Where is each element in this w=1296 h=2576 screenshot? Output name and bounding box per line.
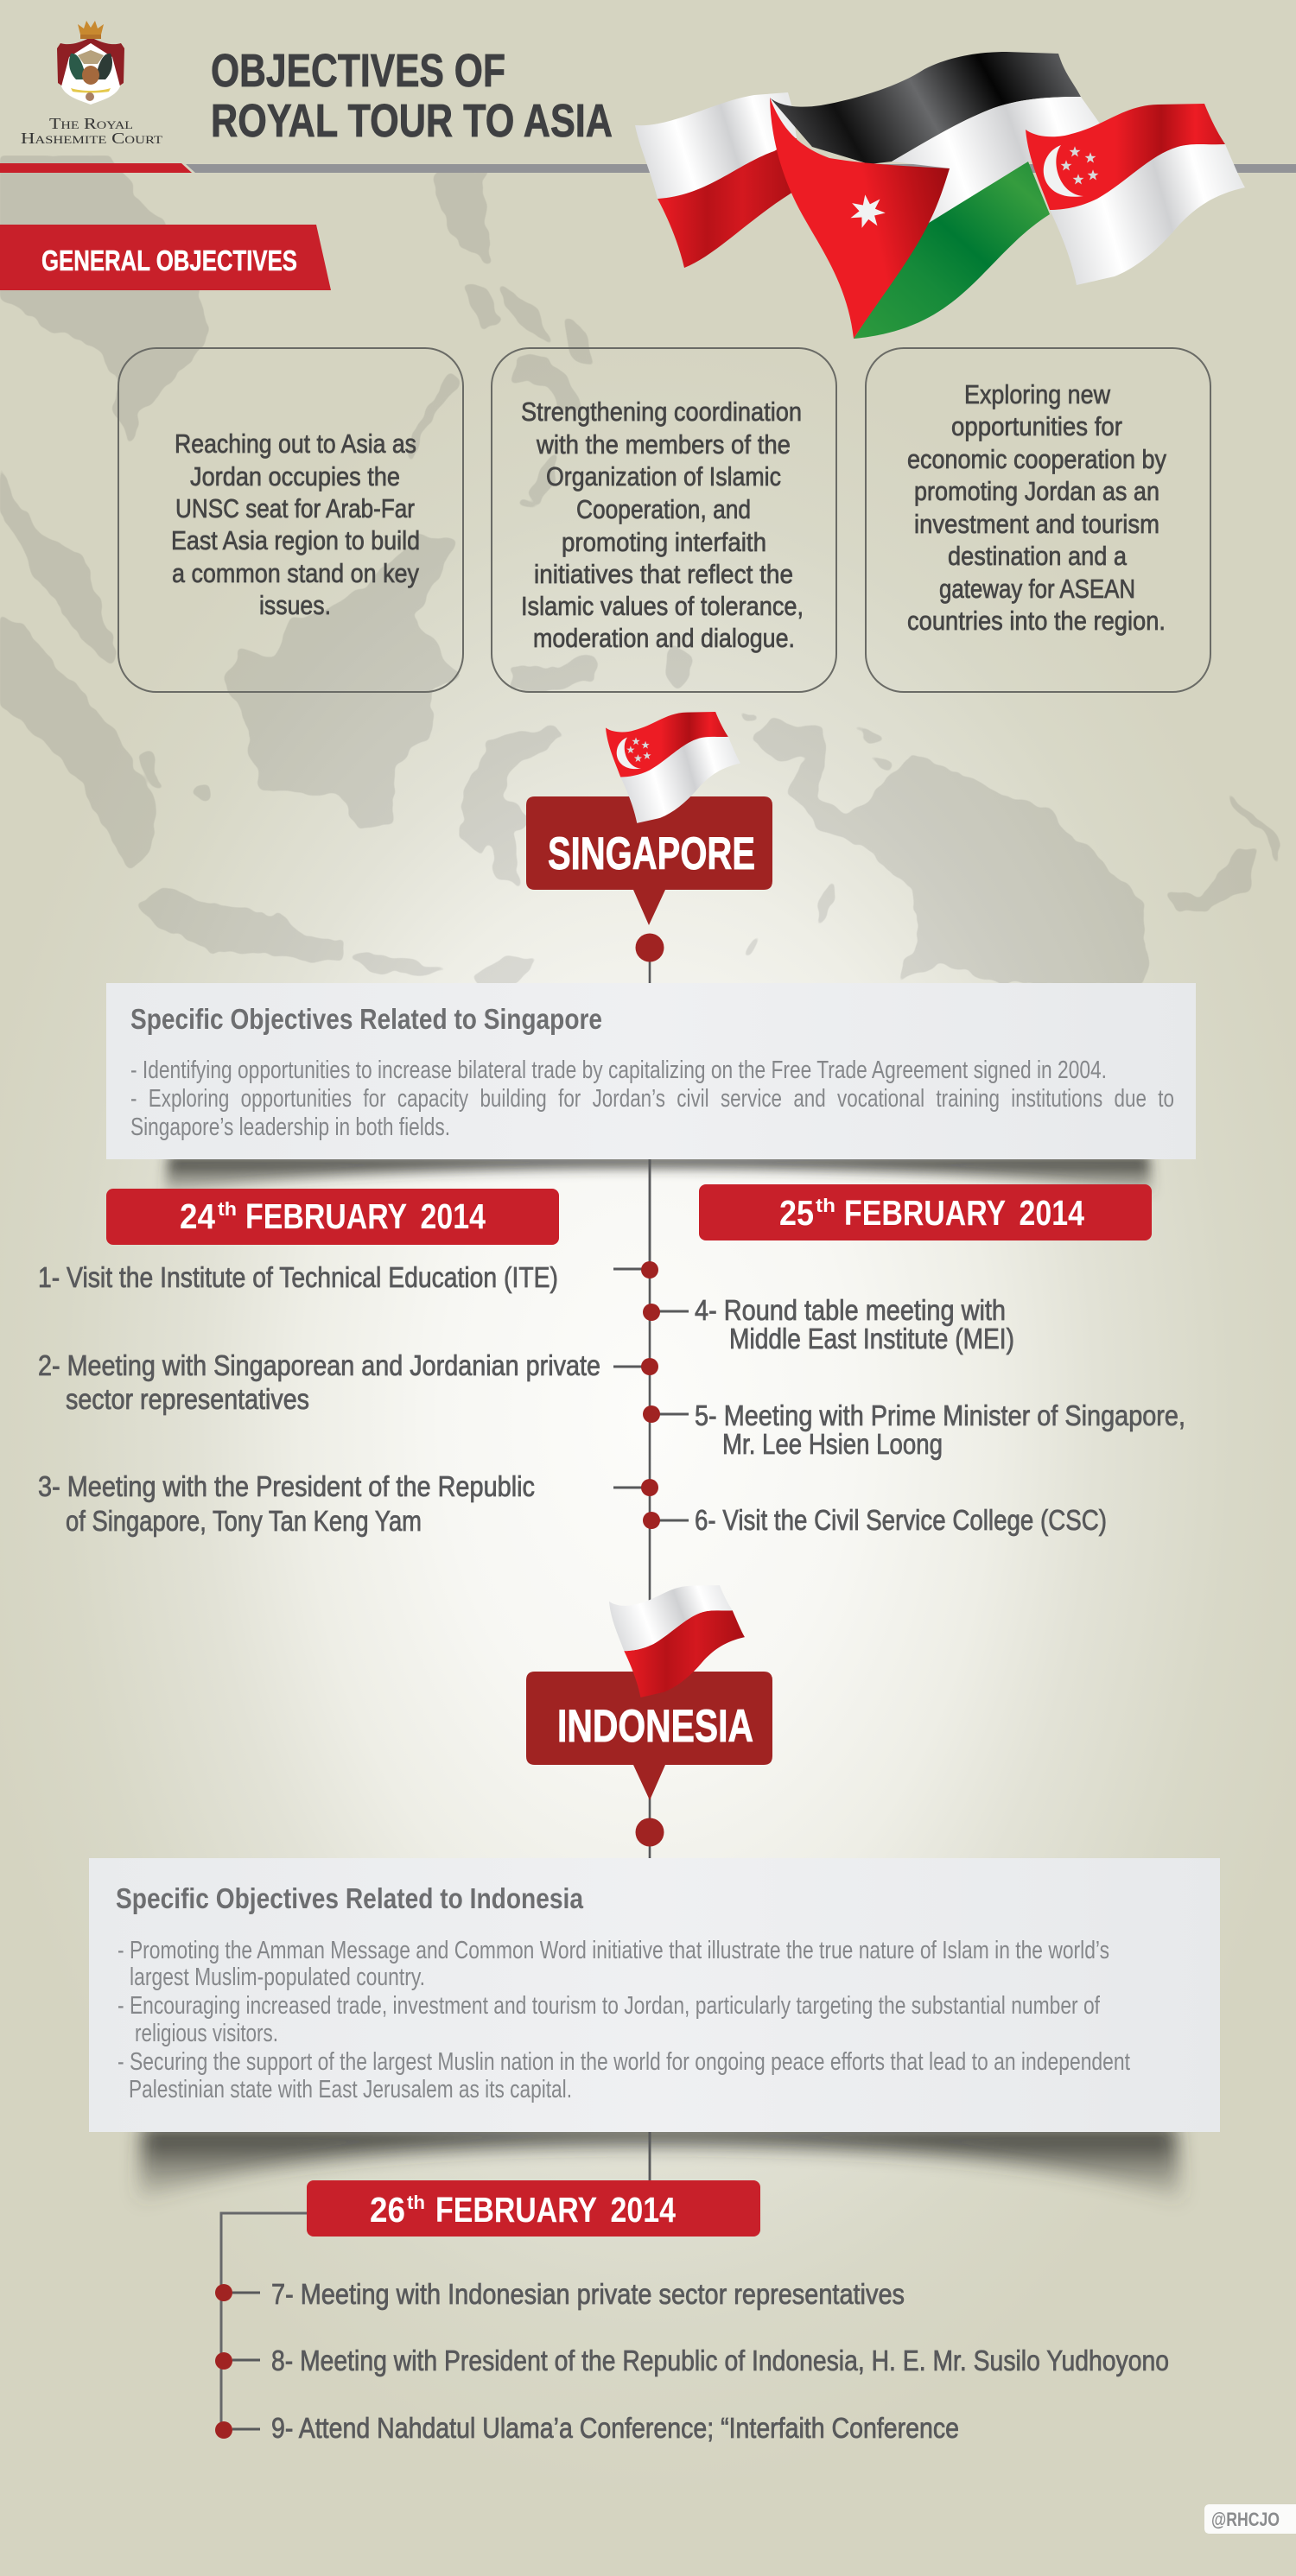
date: 24 February: [106, 1189, 559, 1245]
panel: objective 3: destination and a: [948, 541, 1128, 571]
item 4: 4- Round table meeting with: [695, 1294, 1006, 1326]
item 8: 8- Meeting with President of the Republic of Indonesia, H. E. Mr. Susilo Yudhoyono: [271, 2344, 1169, 2376]
panel: objective 2: moderation and dialogue.: [533, 623, 795, 653]
panel: objective 3: Exploring new: [964, 379, 1111, 409]
panel shadow: Singapore: [164, 1156, 1153, 1196]
logo text: The Royal: [49, 115, 133, 132]
flag: Indonesia: [635, 92, 799, 268]
date: 25 February: FEBRUARY 2014: [844, 1193, 1084, 1233]
panel: objective 2: initiatives that reflect the: [534, 559, 793, 589]
item 2: [38, 1349, 658, 1415]
flag: Singapore small: [606, 712, 740, 823]
social handle tag: @RHCJO: [1211, 2509, 1280, 2530]
panel: objective 1: [118, 348, 463, 692]
panel: objective 3: [866, 348, 1210, 692]
panel: specific objectives Indonesia: religious visitors.: [135, 2020, 278, 2047]
item 7: 7- Meeting with Indonesian private sector representatives: [271, 2278, 905, 2310]
item 1: 1- Visit the Institute of Technical Education (ITE): [38, 1261, 558, 1293]
item 6: 6- Visit the Civil Service College (CSC): [695, 1504, 1107, 1536]
panel: objective 3: gateway for ASEAN: [939, 574, 1135, 604]
panel: specific objectives Indonesia: [89, 1858, 1220, 2132]
date: 26 February: FEBRUARY 2014: [435, 2190, 676, 2230]
callout: Singapore: SINGAPORE: [548, 828, 755, 879]
date: 24 February: FEBRUARY 2014: [245, 1196, 486, 1236]
logo text: [21, 115, 162, 147]
item 5: 5- Meeting with Prime Minister of Singapore,: [695, 1399, 1185, 1431]
callout: Singapore: [526, 796, 772, 925]
map of South-East Asia: [0, 154, 1280, 985]
banner: general objectives: GENERAL OBJECTIVES: [41, 244, 297, 276]
timeline node: Singapore: [636, 933, 664, 962]
panel: objective 1: Reaching out to Asia as: [175, 428, 416, 459]
item 5: Mr. Lee Hsien Loong: [722, 1428, 943, 1460]
item 3: [38, 1470, 658, 1537]
coat of arms: [57, 21, 124, 105]
flag: Indonesia small: [609, 1585, 745, 1697]
flags: Indonesia, Jordan, Singapore: [635, 52, 1245, 339]
date: 24 February: 24: [180, 1196, 215, 1236]
header divider bars: [0, 163, 1296, 173]
date: 25 February: [699, 1184, 1152, 1240]
logo: Royal Hashemite Court: [21, 21, 162, 147]
item 9: 9- Attend Nahdatul Ulama’a Conference; “Interfaith Conference: [271, 2412, 959, 2444]
panel shadow: Indonesia: [138, 2127, 1182, 2203]
date: 26 February: th: [407, 2192, 425, 2213]
panel: objective 3: investment and tourism: [914, 509, 1159, 539]
panel: objective 3: opportunities for: [951, 411, 1122, 441]
panel: specific objectives Indonesia: Palestinian state with East Jerusalem as its capital.: [129, 2076, 572, 2103]
date: 25 February: th: [816, 1195, 835, 1216]
date: 25 February: 25: [779, 1193, 814, 1233]
panel: objective 2: with the members of the: [536, 429, 791, 460]
panel: specific objectives Singapore: Specific Objectives Related to Singapore: [130, 1003, 602, 1035]
date: 26 February: 26: [370, 2190, 405, 2230]
panel: objective 2: Islamic values of tolerance,: [521, 591, 804, 621]
item 3: 3- Meeting with the President of the Republic: [38, 1470, 535, 1502]
banner: general objectives: [0, 225, 331, 290]
date: 26 February: [307, 2180, 760, 2237]
item 2: sector representatives: [66, 1383, 309, 1415]
date: 24 February: th: [218, 1198, 237, 1220]
central timeline line: [649, 948, 651, 2186]
panel: objective 1: East Asia region to build: [171, 525, 420, 555]
panel: specific objectives Singapore: Singapore’s leadership in both fields.: [130, 1114, 450, 1141]
logo text: Hashemite Court: [21, 130, 162, 147]
line segment below Singapore panel: [649, 1159, 651, 1278]
panel: specific objectives Indonesia: largest Muslim-populated country.: [130, 1964, 425, 1991]
panel: objective 1: a common stand on key: [172, 558, 419, 588]
flag: Jordan: [770, 52, 1110, 339]
panel: objective 1: issues.: [259, 590, 331, 620]
title: ROYAL TOUR TO ASIA: [211, 95, 613, 147]
line segment below Indonesia panel: [649, 2132, 651, 2180]
panel: objective 3: promoting Jordan as an: [914, 476, 1159, 506]
panel: objective 2: Strengthening coordination: [521, 397, 802, 427]
panel: objective 1: Jordan occupies the: [190, 461, 400, 492]
flag: Singapore: [1026, 104, 1245, 285]
item 4: Middle East Institute (MEI): [729, 1323, 1014, 1355]
panel: objective 2: Organization of Islamic: [546, 461, 781, 492]
item 3: of Singapore, Tony Tan Keng Yam: [66, 1505, 422, 1537]
panel: objective 3: economic cooperation by: [907, 444, 1166, 474]
panel: objective 2: [492, 348, 836, 692]
panel: objective 2: Cooperation, and: [576, 494, 751, 524]
panel: objective 2: promoting interfaith: [562, 527, 766, 557]
callout: Indonesia: INDONESIA: [557, 1701, 753, 1752]
callout: Indonesia: [526, 1672, 772, 1800]
item 5: [643, 1399, 1185, 1460]
connector: 26 February list: [221, 2213, 307, 2430]
panel: specific objectives Indonesia: Specific Objectives Related to Indonesia: [116, 1882, 584, 1914]
panel: specific objectives Singapore: [106, 983, 1196, 1159]
timeline node: Indonesia: [636, 1818, 664, 1847]
title: [211, 45, 613, 147]
panel: objective 1: UNSC seat for Arab-Far: [175, 493, 415, 523]
title: OBJECTIVES OF: [211, 45, 505, 97]
social handle tag: [1204, 2504, 1296, 2534]
item 2: 2- Meeting with Singaporean and Jordanian private: [38, 1349, 600, 1381]
item 4: [643, 1294, 1014, 1355]
panel: objective 3: countries into the region.: [907, 606, 1166, 636]
